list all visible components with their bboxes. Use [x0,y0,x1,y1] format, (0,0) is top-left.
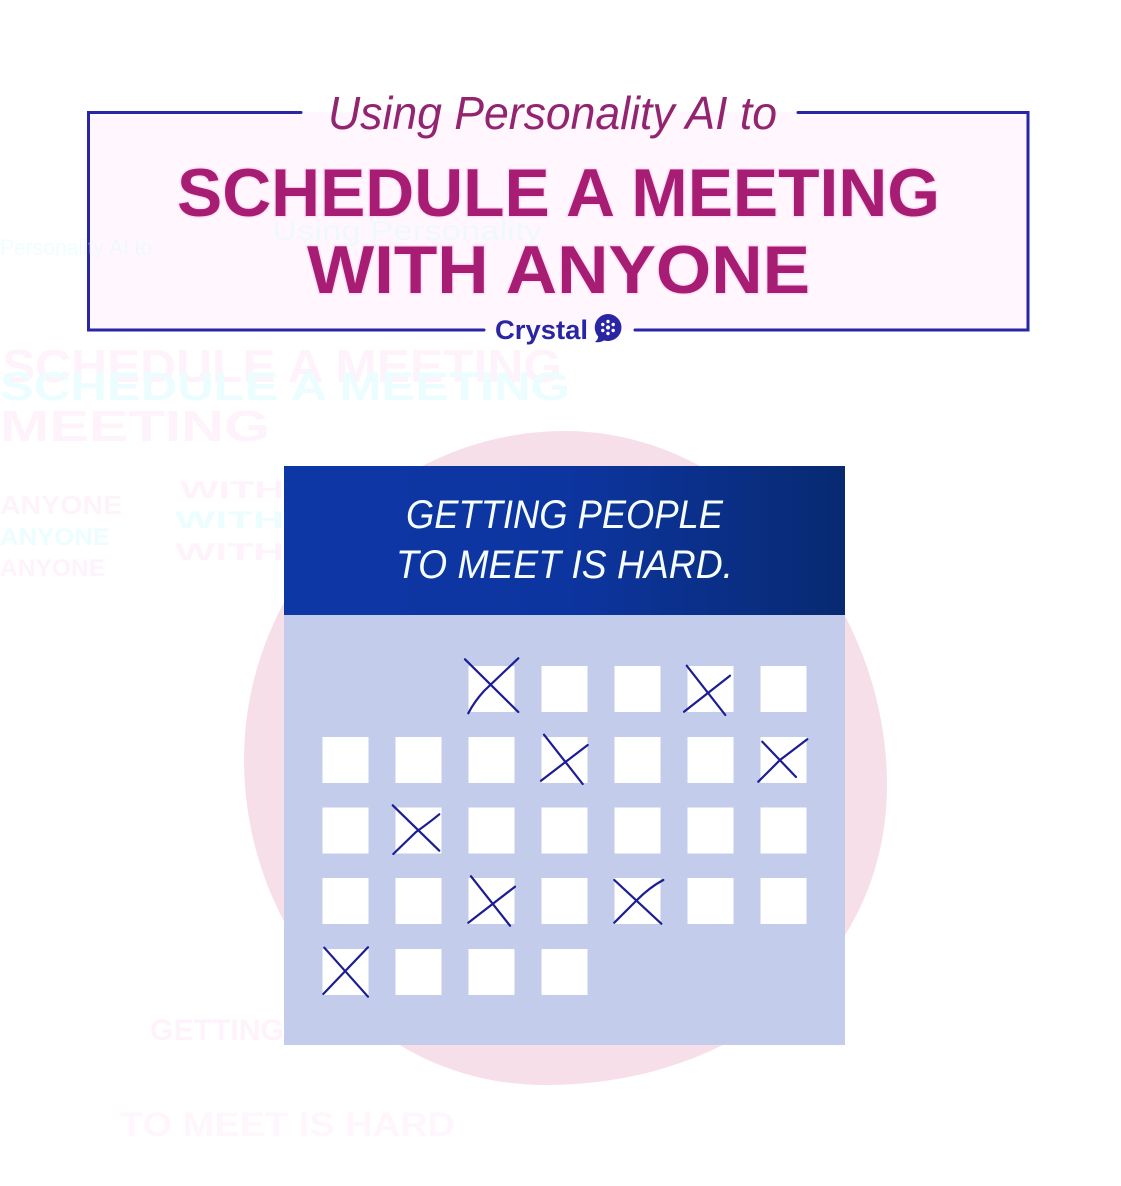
text: ANYONE [0,524,110,551]
logo icon: speech bubble [595,314,621,342]
text: ANYONE [0,555,105,582]
calendar day squares [322,666,806,995]
text: WITH [175,539,284,566]
header text [396,493,733,587]
crossed-out days [323,658,807,997]
logo wordmark: Crystal [495,315,588,345]
main heading [177,155,940,308]
Crystal logo [495,314,621,345]
text: SCHEDULE A MEETING [0,365,570,409]
text: Using Personality [272,215,542,246]
text: WITH [180,477,284,504]
text: SCHEDULE A MEETING [2,340,562,392]
calendar card [284,466,845,1045]
text: ANYONE [0,490,122,520]
calendar body [284,615,845,1045]
header text: TO MEET IS HARD. [396,543,733,587]
calendar header [284,466,845,615]
title frame [88,112,1028,330]
text: MEETING [0,402,270,451]
text: TO MEET IS HARD [120,1106,455,1144]
text: WITH [175,507,284,534]
background blob [244,431,887,1085]
text: GETTING [150,1014,284,1047]
main heading: SCHEDULE A MEETING [177,155,940,231]
header text: GETTING PEOPLE [406,493,724,537]
subtitle: Using Personality AI to [328,87,777,139]
main heading: WITH ANYONE [307,232,810,308]
text: Personality AI to [0,235,152,260]
